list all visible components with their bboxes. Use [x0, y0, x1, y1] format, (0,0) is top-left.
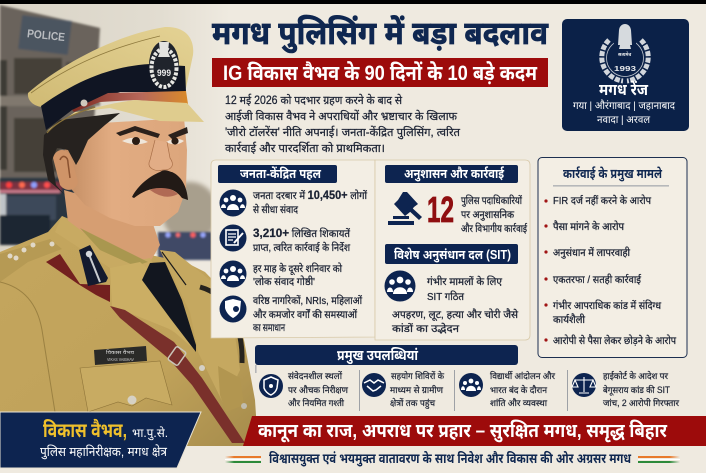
- name plate: Vikas Vaibhav: विकास वैभव,: [43, 418, 127, 442]
- heading pill: [218, 165, 337, 183]
- text: SIT formed: गंभीर मामलों के लिए: [427, 276, 502, 288]
- achievement: law and order: शांति और व्यवस्था: [490, 397, 548, 408]
- bullet list: [544, 195, 676, 347]
- panel: major action cases: [538, 158, 687, 358]
- text: 12 officers: पुलिस पदाधिकारियों: [461, 195, 522, 207]
- intro paragraph: 12 मई 2026 को पदभार ग्रहण करने के बाद से: [225, 93, 402, 107]
- heading pill: SIT: विशेष अनुसंधान दल (SIT): [394, 247, 511, 264]
- intro paragraph: कार्रवाई और पारदर्शिता को प्राथमिकता।: [225, 141, 385, 155]
- intro paragraph: आईजी विकास वैभव ने अपराधियों और भ्रष्टाचार के खिलाफ: [225, 109, 458, 123]
- epaulette: [0, 239, 62, 282]
- panel: public-centric policing: [211, 160, 375, 338]
- panel: Magadh Range logo: [562, 19, 689, 131]
- heading pill: SIT: [385, 244, 518, 264]
- right pocket: [218, 366, 244, 412]
- icon: gavel: [388, 192, 422, 225]
- text: cases solved: [392, 309, 518, 335]
- cap band: [41, 64, 186, 130]
- icon: police emblem: 1993: [614, 66, 636, 73]
- right eye: [166, 139, 184, 144]
- cap visor: [46, 100, 204, 132]
- panel: Magadh Range logo: मगध रेंज: [599, 80, 648, 99]
- text: cases solved: अपहरण, लूट, हत्या और चोरी जैसे: [392, 309, 518, 321]
- achievement: law and order: [459, 370, 555, 408]
- text: 12 officers: पर अनुशासनिक: [461, 209, 514, 221]
- head: [62, 118, 187, 226]
- icon: people group: [384, 270, 416, 302]
- heading banner: IG 90 days: IG विकास वैभव के 90 दिनों के 10 बड़े कदम: [223, 61, 537, 85]
- text: jan darbar: से सीधा संवाद: [253, 204, 299, 216]
- black collar badge: [79, 245, 108, 286]
- achievement: law and order: विद्यार्थी आंदोलन और: [490, 370, 555, 381]
- mustache: [132, 170, 188, 200]
- vehicle lights left: [0, 178, 75, 245]
- achievement: camps: [362, 370, 445, 409]
- heading: main title: मगध पुलिसिंग में बड़ा बदलाव: [212, 15, 549, 53]
- officer figure: [0, 27, 258, 446]
- panel: Magadh Range logo: गया | औरंगाबाद | जहानाबाद: [573, 100, 676, 112]
- red collar patch: [46, 254, 110, 302]
- lapel left: [110, 262, 195, 350]
- text: lok samvad: 'लोक संवाद गोष्ठी': [253, 276, 315, 288]
- cap strap: [72, 91, 188, 112]
- cap badge: [149, 41, 179, 89]
- text: 12 officers: [461, 195, 528, 235]
- panel: key achievements: प्रमुख उपलब्धियां: [337, 347, 419, 365]
- trees at right: [162, 182, 218, 242]
- slogan banner: [243, 416, 706, 446]
- bullet list: FIR दर्ज नहीं करने के आरोप: [553, 195, 651, 207]
- text: senior citizens: वरिष्ठ नागरिकों, NRIs, महिलाओं: [253, 295, 363, 307]
- panel: key achievements: [255, 345, 679, 411]
- bullet list: एकतरफा / सतही कार्रवाई: [553, 274, 642, 286]
- panel: discipline and SIT: [375, 160, 530, 340]
- bullet list: अनुसंधान में लापरवाही: [553, 247, 630, 259]
- heading pill: जनता-केंद्रित पहल: [240, 166, 321, 181]
- ear: [53, 150, 78, 190]
- text: senior citizens: का समाधान: [253, 323, 285, 334]
- name plate: VIKAS VAIBHAV: [107, 357, 134, 362]
- lips: [150, 187, 178, 197]
- bullet list: आरोपी से पैसा लेकर छोड़ने के आरोप: [553, 335, 676, 347]
- text: complaints: 3,210+ लिखित शिकायतें: [253, 226, 350, 240]
- slogan banner: कानून का राज, अपराध पर प्रहार – सुरक्षित मगध, समृद्ध बिहार: [258, 420, 668, 443]
- name plate: [94, 346, 147, 365]
- icon: written complaint: [220, 224, 246, 252]
- text: 12 officers: और विभागीय कार्रवाई: [461, 223, 528, 235]
- bullet list: पैसा मांगने के आरोप: [553, 221, 624, 233]
- tagline with tricolor strokes: विश्वासयुक्त एवं भयमुक्त वातावरण के साथ निवेश और विकास की ओर अग्रसर मगध: [269, 449, 632, 468]
- achievement: inspections: और नियमित गश्ती: [288, 397, 345, 408]
- tie: [142, 262, 196, 352]
- achievement: camps: माध्यम से ग्रामीण: [390, 384, 443, 395]
- collar shirt: [55, 216, 190, 342]
- bullet list: कार्यशैली: [553, 314, 585, 326]
- text: SIT formed: SIT गठित: [427, 291, 464, 303]
- icon: shield person: [220, 296, 246, 322]
- achievement: high court SIT: जांच, 2 आरोपी गिरफ्तार: [603, 397, 679, 408]
- cap crown: [28, 27, 193, 107]
- intro paragraph: 'जीरो टॉलरेंस' नीति अपनाई। जनता-केंद्रित पुलिसिंग, त्वरित: [225, 125, 460, 139]
- chest pocket: [80, 361, 172, 412]
- icon: people group: [220, 190, 246, 216]
- text: lok samvad: हर माह के दूसरे शनिवार को: [253, 263, 342, 275]
- neck: [64, 190, 160, 263]
- name plate: Vikas Vaibhav: पुलिस महानिरीक्षक, मगध क्षेत्र: [40, 444, 168, 460]
- belt strap: [110, 306, 245, 443]
- text: complaints: प्राप्त, त्वरित कार्रवाई के निर्देश: [253, 242, 350, 254]
- bullet list: गंभीर आपराधिक कांड में संदिग्ध: [553, 300, 662, 312]
- name plate: Vikas Vaibhav: [0, 412, 201, 468]
- cap badge: 999: [157, 68, 171, 78]
- achievement: camps: सहयोग शिविरों के: [391, 370, 445, 381]
- background scene: police building and vehicles: POLICE: [26, 28, 66, 44]
- achievement: camps: क्षेत्रों तक पहुंच: [390, 397, 435, 409]
- intro paragraph: [225, 93, 460, 155]
- achievement: high court SIT: हाईकोर्ट के आदेश पर: [603, 370, 668, 381]
- text: lok samvad: [253, 263, 342, 288]
- text: jan darbar: [253, 190, 367, 216]
- name plate: Vikas Vaibhav: भा.पु.से.: [132, 425, 168, 441]
- achievement: inspections: संवेदनशील स्थलों: [288, 370, 343, 381]
- achievement: high court SIT: बेगूसराय कांड की SIT: [603, 384, 670, 396]
- uniform: [0, 216, 258, 446]
- icon: police emblem: सत्यमेव: [618, 51, 631, 57]
- hair: [43, 113, 120, 195]
- panel: major action cases: कार्रवाई के प्रमुख मामले: [563, 166, 662, 183]
- heading pill: अनुशासन और कार्रवाई: [404, 166, 505, 183]
- background scene: police building and vehicles: [0, 4, 230, 260]
- achievement: inspections: [259, 370, 348, 408]
- right collar: [160, 250, 240, 405]
- lanyard: [200, 287, 242, 363]
- text: senior citizens: और कमजोर वर्गों की समस्याओं: [253, 309, 358, 321]
- left eye: [122, 138, 148, 144]
- nose: [149, 140, 172, 171]
- vehicle lights right: [158, 232, 214, 260]
- achievement: law and order: भारत बंद के दौरान: [490, 384, 548, 395]
- text: senior citizens: [253, 295, 363, 334]
- name plate: विकास वैभव: [106, 349, 134, 356]
- text: SIT formed: [427, 276, 502, 303]
- left eyebrow: [116, 126, 160, 138]
- top black bar: [0, 0, 706, 4]
- text: complaints: [253, 226, 350, 254]
- text: cases solved: कांडों का उद्भेदन: [392, 323, 460, 335]
- icon: police emblem: [602, 24, 648, 81]
- right eyebrow: [168, 127, 188, 139]
- stat: 12: 12: [427, 189, 454, 230]
- panel: Magadh Range logo: नवादा | अरवल: [597, 115, 650, 126]
- text: jan darbar: जनता दरबार में 10,450+ लोगों: [253, 190, 367, 202]
- achievement: inspections: पर औचक निरीक्षण: [288, 384, 348, 395]
- achievement: high court SIT: [572, 370, 679, 408]
- icon: people group: [220, 260, 246, 288]
